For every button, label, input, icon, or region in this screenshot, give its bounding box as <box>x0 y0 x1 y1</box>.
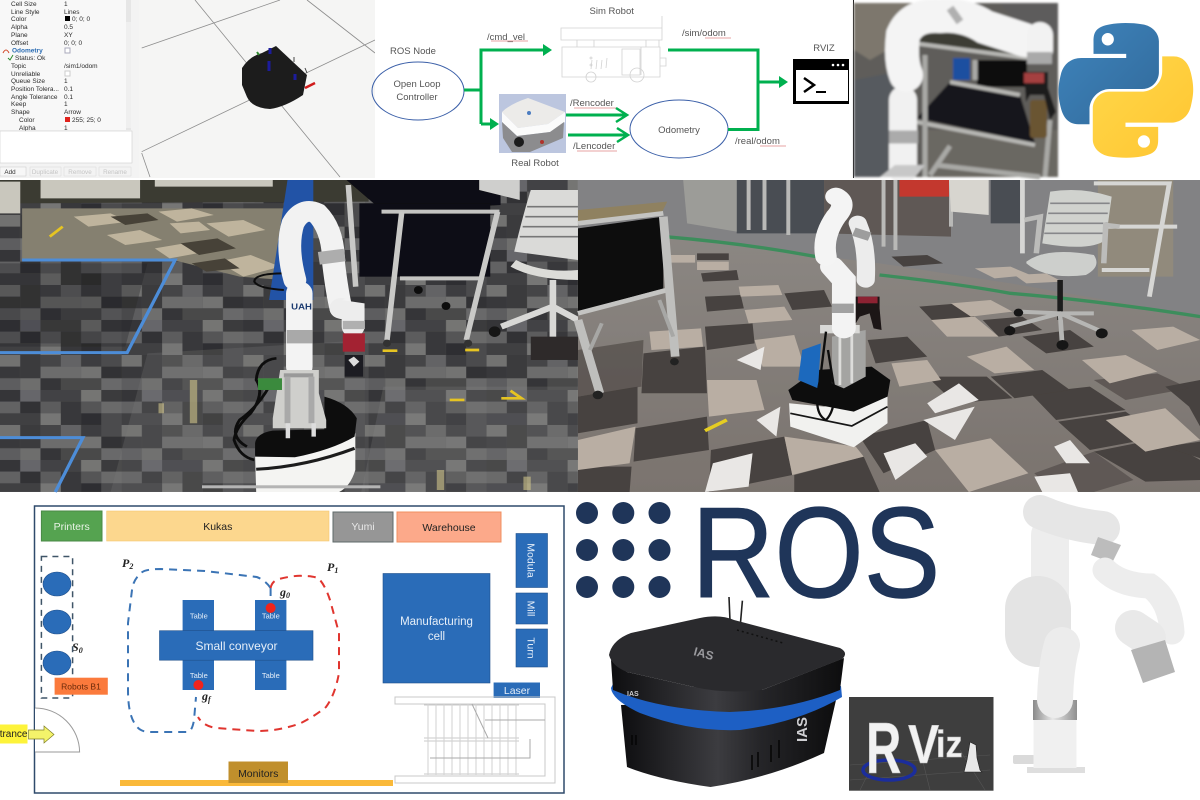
panel: arm picking from shelves photo <box>854 3 1058 177</box>
topic labels: /cmd_vel <box>487 32 525 43</box>
panel: floor plan <box>0 506 564 793</box>
lower column <box>1034 700 1076 768</box>
silver tool flange <box>1131 640 1175 683</box>
glare streaks <box>158 380 531 490</box>
robot arm <box>287 211 365 367</box>
path and goal labels: P <box>122 556 129 570</box>
RViz buttons: Duplicate <box>32 169 59 176</box>
path and goal labels: P <box>327 560 334 574</box>
path and goal labels: f <box>208 695 212 704</box>
RViz property list: 0.1 <box>64 94 73 101</box>
brand text: IAS <box>794 717 811 742</box>
tables and conveyor <box>160 600 313 690</box>
robots B1 label: Robots B1 <box>61 682 101 692</box>
tables and conveyor: Table <box>190 671 208 680</box>
lighter floor zones <box>111 340 369 492</box>
manufacturing cell: Manufacturing <box>400 616 473 628</box>
arrows: controller outputs <box>464 44 788 142</box>
RViz property list: Color <box>11 16 27 23</box>
vents <box>632 735 779 770</box>
path and goal labels: 2 <box>128 562 133 571</box>
manufacturing cell: cell <box>428 631 445 643</box>
manufacturing cell <box>383 574 490 683</box>
RViz property list: 0; 0; 0 <box>64 40 82 47</box>
shelves <box>912 20 1050 177</box>
background lab band <box>0 180 369 203</box>
RViz 3D view <box>139 0 375 178</box>
icon: black mobile robot render <box>609 597 845 787</box>
ROS wordmark: ROS <box>692 480 940 624</box>
RViz property list: Keep <box>11 101 27 108</box>
RViz 3D wordmark: iz <box>936 722 963 765</box>
panel: robot photo 1, dark marble floor <box>0 180 578 492</box>
grid lines <box>850 750 990 790</box>
silver band <box>1033 700 1077 720</box>
cable loop <box>254 273 284 290</box>
robots B1 label <box>55 678 108 695</box>
blue ring <box>863 760 915 780</box>
topic labels: /sim/odom <box>682 28 726 39</box>
top plate <box>609 616 845 691</box>
blue battery box <box>798 343 821 388</box>
robot arm <box>825 197 870 328</box>
labels: Open Loop <box>393 79 441 90</box>
glare patches <box>705 347 1090 492</box>
path and goal labels: 0 <box>79 646 83 655</box>
kukas <box>107 511 329 541</box>
RViz property list: Plane <box>11 32 28 39</box>
turn: Turn <box>524 637 536 659</box>
RViz property list: Status: Ok <box>15 55 46 62</box>
electrical cabinets <box>683 180 737 232</box>
tables and conveyor: Table <box>190 612 208 620</box>
path P2 dashed blue <box>128 569 271 732</box>
labels: Controller <box>396 92 438 103</box>
RViz 3D wordmark: R <box>866 709 901 789</box>
labels: Odometry <box>658 125 700 136</box>
green control board <box>258 378 282 390</box>
door arc <box>35 708 80 752</box>
warehouse <box>397 512 501 542</box>
labels <box>390 6 835 169</box>
brand text <box>627 644 811 742</box>
silver joint <box>1091 537 1121 563</box>
robot arm <box>889 8 1052 170</box>
yumi: Yumi <box>351 521 375 533</box>
RViz property list: Cell Size <box>11 1 37 8</box>
aluminium frame on base <box>273 370 326 438</box>
RViz property list: 0.1 <box>64 86 73 93</box>
blue floor tape <box>0 260 175 492</box>
labels: Sim Robot <box>590 6 634 17</box>
mobile base <box>255 397 357 492</box>
arm branding: UAH <box>291 302 312 311</box>
path and goal labels: g <box>280 585 286 599</box>
RViz property list: 1 <box>64 101 68 108</box>
foot <box>1013 755 1085 773</box>
upper body <box>611 658 844 712</box>
right edge line <box>853 0 854 178</box>
mill: Mill <box>524 601 536 616</box>
entrance arrow <box>28 726 54 743</box>
path and goal labels: g <box>202 689 208 703</box>
yellow floor marks <box>50 227 522 400</box>
blue plate <box>611 684 842 730</box>
light tiled floor area <box>22 208 284 280</box>
tables and conveyor: Table <box>262 612 280 620</box>
desk <box>346 180 501 347</box>
yumi <box>333 512 393 542</box>
gripper <box>856 297 882 330</box>
dark tiles <box>578 253 1200 492</box>
kukas: Kukas <box>203 521 232 533</box>
ellipse: controller <box>372 62 464 120</box>
RViz property list: 1 <box>64 125 68 132</box>
video scrub bar <box>202 485 380 488</box>
panel: RViz screenshot <box>0 0 375 178</box>
RViz property list: XY <box>64 32 73 39</box>
RViz property list: Topic <box>11 63 27 70</box>
white cabinets <box>0 180 273 213</box>
RViz property list: Angle Tolerance <box>11 94 58 101</box>
ROS nine dots <box>576 502 670 598</box>
RViz property list: Unreliable <box>11 71 41 78</box>
left table <box>578 202 679 399</box>
mobile base <box>788 367 890 447</box>
RViz empty description box <box>0 131 132 163</box>
RViz buttons: Rename <box>103 169 127 176</box>
elbow silver <box>1047 632 1072 660</box>
mill <box>516 593 548 624</box>
chair <box>1004 190 1120 350</box>
icon: simulated robot outline <box>561 16 666 82</box>
monitors <box>228 762 288 783</box>
turn <box>516 629 548 667</box>
modula: Modula <box>524 543 536 578</box>
chair <box>479 180 578 360</box>
modula <box>516 534 548 588</box>
cables <box>817 332 834 420</box>
goal gf marker <box>193 680 203 690</box>
gripper <box>343 333 365 377</box>
RViz property list: Line Style <box>11 9 40 16</box>
gripper red part <box>858 297 878 303</box>
stairs <box>395 697 555 783</box>
green floor tape <box>665 237 1200 317</box>
lab background <box>578 180 1200 317</box>
RViz 3D wordmark <box>866 709 963 789</box>
labels: ROS Node <box>390 46 436 57</box>
entrance label <box>0 724 28 744</box>
icon: real robot photo <box>499 94 566 153</box>
ellipse: odometry <box>630 100 728 158</box>
icon: white robot arm render <box>1013 512 1175 773</box>
RViz property list: Shape <box>11 109 30 116</box>
topic labels: /real/odom <box>735 136 780 147</box>
antennas <box>729 597 742 633</box>
RViz property list: Position Tolera... <box>11 86 59 93</box>
robot start area <box>41 556 73 698</box>
light tiles <box>578 255 1200 492</box>
RViz property list: Color <box>19 117 35 124</box>
dark floor zone left <box>0 263 147 347</box>
topic labels: /Lencoder <box>573 141 615 152</box>
path and goal labels: 0 <box>286 591 290 600</box>
gripper and bag <box>1024 72 1056 138</box>
topic labels <box>487 28 786 152</box>
path and goal labels: S <box>72 640 79 654</box>
waist <box>1055 645 1062 700</box>
RViz property list: Odometry <box>12 48 43 54</box>
cables <box>234 358 276 460</box>
gripper mount <box>880 165 925 177</box>
monitors: Monitors <box>238 768 278 780</box>
RViz property list: Queue Size <box>11 78 45 85</box>
RViz property list: /sim1/odom <box>64 63 98 70</box>
RViz property list: 0.5 <box>64 24 73 31</box>
path and goal labels: 1 <box>334 566 338 575</box>
laser <box>494 682 540 698</box>
RViz buttons: Remove <box>68 169 92 176</box>
yellow floor mark <box>705 420 727 431</box>
logo: ROS <box>576 480 940 624</box>
RViz buttons: Add <box>4 169 16 176</box>
RViz property list: 1 <box>64 1 68 8</box>
printers <box>41 511 102 541</box>
tables and conveyor: Small conveyor <box>195 639 278 653</box>
panel: ROS node diagram <box>372 0 854 180</box>
RViz property list: Alpha <box>11 24 28 31</box>
monitors bar <box>120 780 393 786</box>
upper arm <box>1031 535 1069 615</box>
panel: RViz logo <box>849 697 994 791</box>
small robot figure <box>964 742 982 772</box>
shoulder <box>1040 512 1103 528</box>
warehouse: Warehouse <box>422 522 476 534</box>
RViz property list: 0; 0; 0 <box>72 16 90 23</box>
RViz property list: Lines <box>64 9 80 16</box>
blue column <box>269 180 313 300</box>
lower body <box>621 700 836 787</box>
plan outer border <box>34 506 564 793</box>
upper link capsule <box>1005 609 1071 634</box>
tables and conveyor: Table <box>262 671 280 680</box>
laser: Laser <box>504 685 531 697</box>
RViz property list: Offset <box>11 40 28 47</box>
goal g0 marker <box>266 603 276 613</box>
forearm <box>1105 570 1172 632</box>
RViz property list <box>0 0 131 132</box>
icon: Python logo <box>1058 23 1193 158</box>
labels: Real Robot <box>511 158 559 169</box>
RViz property list: 255; 25; 0 <box>72 117 101 124</box>
topic labels: /Rencoder <box>570 98 614 109</box>
brand text: IAS <box>692 644 715 663</box>
wrist <box>1133 628 1148 638</box>
aluminium frame <box>820 325 866 388</box>
status lights <box>737 630 783 643</box>
icon: terminal <box>793 59 849 104</box>
RViz property list: 1 <box>64 78 68 85</box>
path and goal labels <box>72 556 338 704</box>
RViz property list: Arrow <box>64 109 81 116</box>
labels: RVIZ <box>813 43 835 54</box>
RViz property list: Alpha <box>19 125 36 132</box>
RViz buttons <box>0 167 131 176</box>
lighter floor zones right <box>361 387 578 492</box>
path P1 dashed red <box>198 576 339 731</box>
RViz 3D wordmark: V <box>908 713 939 775</box>
panel: robot photo 2, checker marble floor <box>578 180 1200 492</box>
printers: Printers <box>54 521 90 533</box>
brand text: IAS <box>627 691 639 698</box>
